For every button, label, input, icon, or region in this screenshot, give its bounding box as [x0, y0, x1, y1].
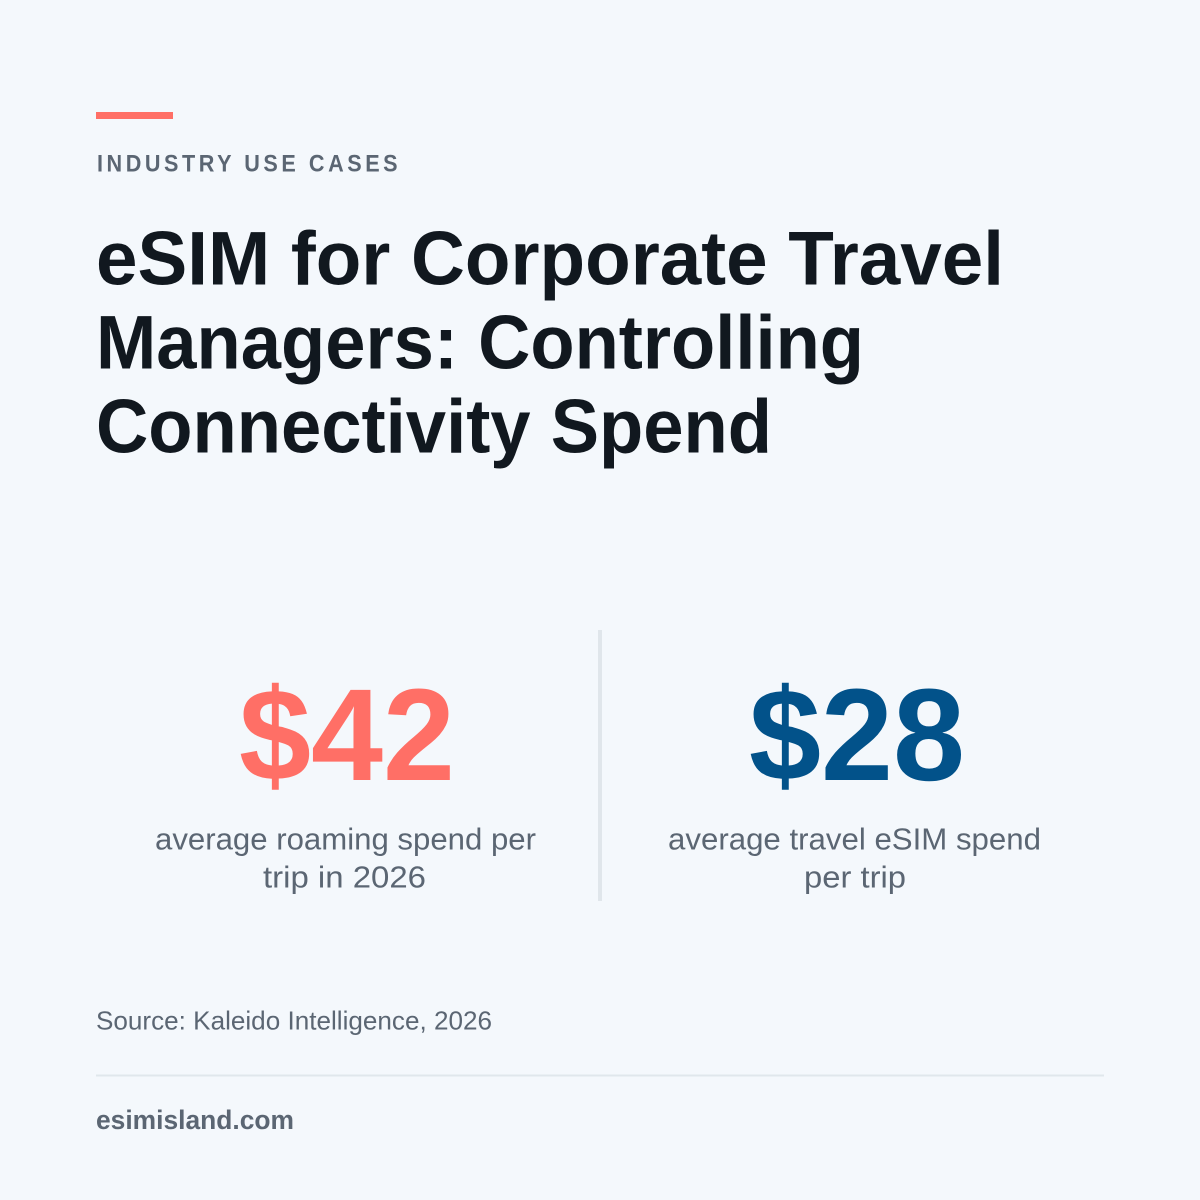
- description: roaming spend: average roaming spend per: [155, 822, 536, 856]
- title: Managers: Controlling: [96, 300, 864, 386]
- description: eSIM spend: [668, 822, 1041, 894]
- title: [96, 216, 1004, 470]
- description: eSIM spend: per trip: [804, 860, 906, 894]
- stat: eSIM spend: [668, 661, 1041, 894]
- description: eSIM spend: average travel eSIM spend: [668, 822, 1041, 856]
- title: eSIM for Corporate Travel: [96, 216, 1004, 302]
- description: roaming spend: trip in 2026: [263, 860, 426, 894]
- eyebrow: industry use cases: INDUSTRY USE CASES: [97, 149, 398, 177]
- stat: roaming spend: [155, 661, 536, 894]
- value: $28: $28: [749, 661, 965, 808]
- brand: esimisland.com: esimisland.com: [96, 1105, 294, 1135]
- source note: Source: Kaleido Intelligence, 2026: [96, 1006, 492, 1036]
- title: Connectivity Spend: [96, 384, 772, 470]
- accent bar: [96, 112, 173, 119]
- value: $42: $42: [239, 661, 455, 808]
- vertical divider: [598, 630, 602, 901]
- footer divider: [96, 1074, 1104, 1076]
- description: roaming spend: [155, 822, 536, 894]
